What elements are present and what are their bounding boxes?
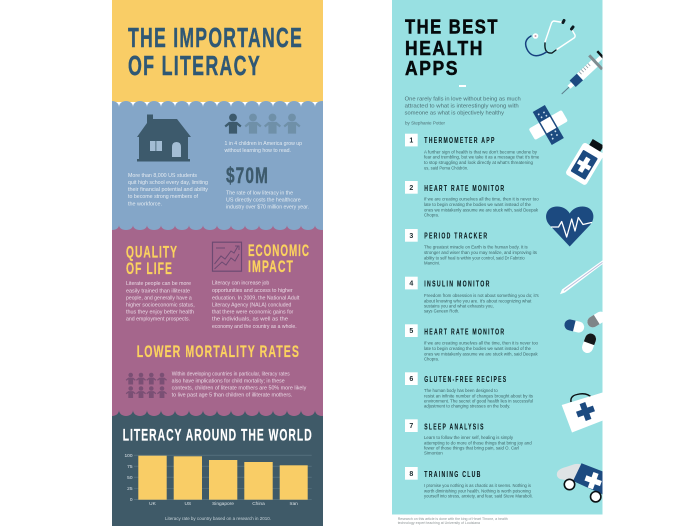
bar chart: literacy rate by country: UK <box>149 501 157 507</box>
title: APPS <box>405 58 459 80</box>
item 7: sleep analysis: 7 <box>409 423 413 430</box>
icon: pills <box>564 312 602 353</box>
item 7: sleep analysis: Learn to follow the inner self, healing is simply <box>424 435 514 440</box>
icon: one in four people <box>224 114 300 134</box>
text: cost of low literacy: The rate of low literacy in the <box>226 190 293 196</box>
footer note <box>398 517 508 525</box>
heading: literacy around the world: LITERACY AROUND THE WORLD <box>123 425 313 444</box>
bar chart: literacy rate by country: Singapore <box>212 501 234 507</box>
icon: heart with pulse <box>546 206 593 246</box>
item 3: period tracker: ability to self heal is within your control, said Dr Fabrizio <box>424 255 525 260</box>
section: yellow header <box>112 0 323 102</box>
item 2: heart rate monitor: If we are creating ourselves all the time, then it is never too <box>424 196 539 201</box>
text: quality of life: and employment prospects. <box>126 317 190 323</box>
bar chart: literacy rate by country: 100 <box>124 453 133 459</box>
panel: the best health apps <box>392 0 609 514</box>
title: THE IMPORTANCE <box>128 22 303 53</box>
item 5: heart rate monitor: ones we mistakenly assume we are stuck with, said Deepak <box>424 351 538 356</box>
byline: by Stephanie Potter <box>405 120 446 125</box>
text: economic impact: Literacy Agency (NALA) concluded <box>212 303 291 309</box>
text: economic impact: the individuals, as well as the <box>212 317 288 323</box>
icon: eight people <box>126 373 167 398</box>
item 8: training club: TRAINING CLUB <box>424 470 482 479</box>
icon: medicine bottle <box>566 139 602 185</box>
text: students quit school: to become strong members of <box>128 194 199 200</box>
item 3: period tracker: Mancini. <box>424 260 440 265</box>
bar chart: literacy rate by country: 50 <box>127 475 133 481</box>
item 6: gluten-free recipes: adjustment to changing stresses on the body. <box>424 404 510 409</box>
icon: growth chart <box>212 242 242 271</box>
section: blue statistics <box>112 101 323 225</box>
item 4: insulin monitor: INSULIN MONITOR <box>424 280 491 289</box>
intro quote: One rarely falls in love without being as much <box>405 96 521 102</box>
item 7: sleep analysis: Simonton <box>424 451 443 456</box>
text: students quit school: quit high school every day, limiting <box>128 180 208 186</box>
bar chart: literacy rate by country: 0 <box>130 497 133 503</box>
text: quality of life: Literate people can be more <box>126 281 191 287</box>
pill: grey and white <box>587 312 602 328</box>
heading: economic impact: ECONOMIC <box>248 241 310 260</box>
text: students quit school: their financial potential and ability <box>128 187 208 193</box>
title: OF LITERACY <box>128 50 261 81</box>
item 4: insulin monitor: Freedom from obsession is not about something you do; it's <box>424 293 539 298</box>
intro quote: attracted to what is interestingly wrong with <box>405 103 519 109</box>
intro quote: someone as what is objectively healthy <box>405 110 504 116</box>
icons column <box>526 20 609 502</box>
text: one in four children: 1 in 4 children in America grow up <box>224 141 302 147</box>
heading: lower mortality rates: LOWER MORTALITY RATES <box>137 342 300 361</box>
icon: thermometer <box>560 260 604 294</box>
item 2: heart rate monitor: 2 <box>409 185 413 192</box>
item 1: thermometer app: 1 <box>409 138 413 145</box>
title: THE BEST <box>405 16 499 38</box>
footer note: Research on this article is done with the king of Heart Throne, a health <box>398 517 508 521</box>
item 8: training club: yourself into stress, anxiety, and fear, said Steve Maraboli. <box>424 494 533 499</box>
item 1: thermometer app: A further sign of health is that we don't become undone by <box>424 149 538 154</box>
item 6: gluten-free recipes: GLUTEN-FREE RECIPES <box>424 375 507 384</box>
heading: economic impact: IMPACT <box>248 257 294 276</box>
item 3: period tracker: PERIOD TRACKER <box>424 232 488 241</box>
text: one in four children <box>224 141 302 154</box>
text: economic impact: economy and the country as a whole. <box>212 324 297 330</box>
intro quote <box>405 96 521 116</box>
icon: ambulance <box>557 463 604 502</box>
text: child mortality: also have implications for child mortality; in these <box>172 379 285 385</box>
bar chart: literacy rate by country <box>124 453 312 507</box>
item 1: thermometer app <box>405 134 540 170</box>
title <box>128 22 303 81</box>
bar chart: literacy rate by country: China <box>252 501 265 507</box>
icon: stethoscope <box>526 20 575 56</box>
item 6: gluten-free recipes <box>405 372 534 409</box>
item 4: insulin monitor: says Geneen Roth. <box>424 309 459 314</box>
icon: house <box>137 114 191 162</box>
text: child mortality: to live past age 5 than children of illiterate mothers. <box>172 393 292 399</box>
text: child mortality: Within developing countries in particular, literacy rates <box>172 371 290 377</box>
section: pink benefits <box>112 225 323 410</box>
item 2: heart rate monitor: ones we mistakenly assume we are stuck with, said Deepak <box>424 207 539 212</box>
item 2: heart rate monitor <box>405 181 539 217</box>
item 4: insulin monitor: about knowing who you are. It's about recognizing what <box>424 298 532 303</box>
text: economic impact: education. In 2009, the National Adult <box>212 295 300 301</box>
item 4: insulin monitor: 4 <box>409 281 413 288</box>
bar chart: literacy rate by country: 25 <box>127 486 133 492</box>
caption: chart source: Literacy rate by country based on a research in 2010. <box>165 516 271 521</box>
bar chart: literacy rate by country: Iran <box>290 501 298 507</box>
text: quality of life: thus they enjoy better health <box>126 310 194 316</box>
text: economic impact: Literacy can increase job <box>212 281 269 287</box>
section: literacy around the world <box>112 410 323 526</box>
text: child mortality <box>172 371 307 399</box>
item 5: heart rate monitor: HEART RATE MONITOR <box>424 328 505 337</box>
heading: quality of life: OF LIFE <box>126 259 173 278</box>
item 4: insulin monitor <box>405 277 539 314</box>
item 8: training club: I promise you nothing is as chaotic as it seems. Nothing is <box>424 483 532 488</box>
item 6: gluten-free recipes: The human body has been designed to <box>424 388 498 393</box>
item 5: heart rate monitor <box>405 324 538 362</box>
item 6: gluten-free recipes: resist an infinite number of changes brought about by its <box>424 393 534 398</box>
text: economic impact: that there were economic gains for <box>212 310 294 316</box>
icon: bandage <box>529 105 568 145</box>
text: students quit school: the workforce. <box>128 201 162 207</box>
item 6: gluten-free recipes: environment. The secret of good health lies in successful <box>424 398 533 403</box>
text: students quit school <box>128 173 208 207</box>
item 7: sleep analysis: fewer of those things that bring pain, said O. Carl <box>424 445 519 450</box>
item 5: heart rate monitor: Chopra. <box>424 357 439 362</box>
item 5: heart rate monitor: If we are creating ourselves all the time, then it is never too <box>424 341 538 346</box>
heading: economic impact <box>248 241 310 276</box>
bar chart: literacy rate by country: 75 <box>127 464 133 470</box>
item 2: heart rate monitor: late to begin creating the bodies we want instead of the <box>424 202 531 207</box>
text: quality of life: higher socioeconomic status, <box>126 303 195 309</box>
text: economic impact: opportunities and access to higher <box>212 288 293 294</box>
title <box>405 16 499 80</box>
heading: quality of life: QUALITY <box>126 242 178 262</box>
item 2: heart rate monitor: HEART RATE MONITOR <box>424 184 505 193</box>
item 7: sleep analysis <box>405 419 532 456</box>
item 1: thermometer app: to stop struggling and look directly at what's threatening <box>424 160 533 165</box>
icon: syringe <box>561 50 602 94</box>
text: quality of life: people, and generally have a <box>126 295 192 301</box>
bar chart: literacy rate by country: US <box>184 501 191 507</box>
text: child mortality: contexts, children of literate mothers are 50% more likely <box>172 386 307 392</box>
text: quality of life <box>126 281 195 323</box>
stat: $70M: $70M <box>226 163 269 188</box>
item 2: heart rate monitor: Chopra. <box>424 212 439 217</box>
item 8: training club: worth diminishing your health. Nothing is worth poisoning <box>424 488 531 493</box>
item 7: sleep analysis: SLEEP ANALYSIS <box>424 423 485 432</box>
pill: black and white <box>582 334 596 353</box>
text: economic impact <box>212 281 300 330</box>
item 3: period tracker: The greatest miracle on Earth is the human body. It is <box>424 245 528 250</box>
footer note: technology expert teaching at University of Louisiana <box>398 521 481 525</box>
item 1: thermometer app: fear and trembling, but we take it as a message that it's time <box>424 155 540 160</box>
item 3: period tracker: stronger and wiser than you may realize, and improving its <box>424 250 538 255</box>
item 3: period tracker: 3 <box>409 233 413 240</box>
text: quality of life: easily trained than illiterate <box>126 288 190 294</box>
item 4: insulin monitor: sustains you and what exhausts you, <box>424 304 494 309</box>
icon: first aid case <box>562 392 604 432</box>
item 5: heart rate monitor: 5 <box>409 328 413 335</box>
item 7: sleep analysis: attempting to do more of those things that bring joy and <box>424 440 532 445</box>
text: cost of low literacy: US directly costs the healthcare <box>226 197 301 203</box>
item 8: training club: 8 <box>409 471 413 478</box>
item 8: training club <box>405 467 533 499</box>
title: HEALTH <box>405 38 484 60</box>
text: cost of low literacy: industry over $70 million every year. <box>226 204 309 210</box>
text: students quit school: More than 8,000 US students <box>128 173 197 179</box>
item 5: heart rate monitor: late to begin creating the bodies we want instead of the <box>424 346 531 351</box>
panel: the importance of literacy <box>112 0 323 526</box>
text: cost of low literacy <box>226 190 309 210</box>
text: one in four children: without learning how to read. <box>224 148 291 154</box>
pill: navy and white <box>564 319 584 333</box>
item 1: thermometer app: us, said Pema Chödrön. <box>424 165 468 170</box>
item 1: thermometer app: THERMOMETER APP <box>424 136 496 145</box>
heading: quality of life <box>126 242 178 278</box>
item 3: period tracker <box>405 229 538 265</box>
item 6: gluten-free recipes: 6 <box>409 376 413 383</box>
